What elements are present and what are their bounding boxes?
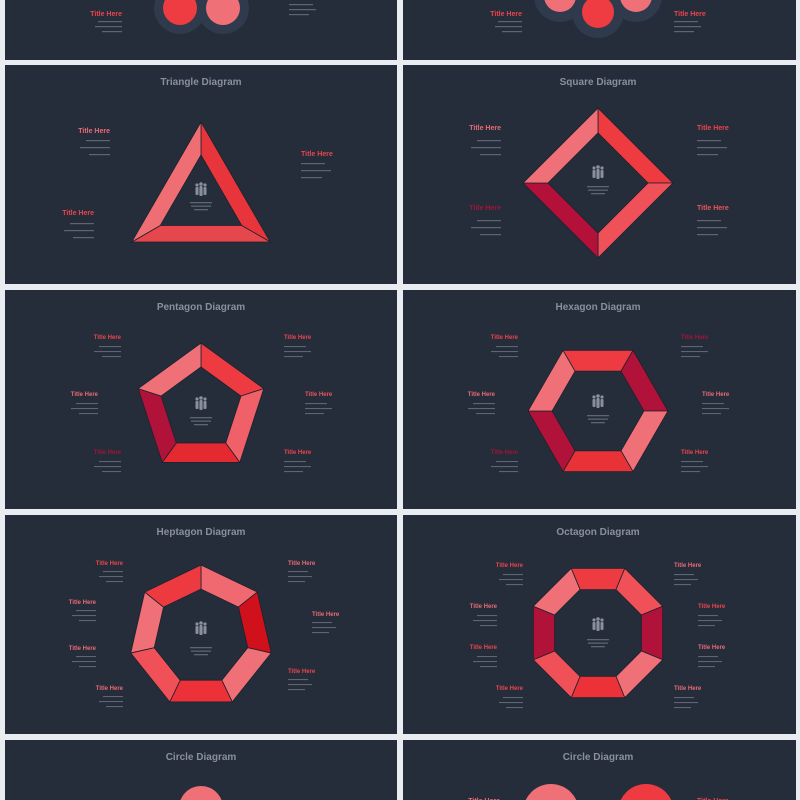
heading: Hexagon Diagram [555,302,641,313]
pentagon shape [138,343,264,462]
slide: top-left partial [5,0,397,60]
heptagon shape [131,565,271,702]
labels: Title Here [491,335,519,341]
labels: Title Here [470,645,498,651]
labels [468,335,730,456]
heading: Circle Diagram [563,752,633,763]
slide: top-right partial: Title Here [674,11,706,18]
labels [62,128,333,217]
labels: Title Here [681,335,709,341]
labels [470,563,726,692]
labels: Title Here [69,600,97,606]
labels: Title Here [674,563,702,569]
panel: heptagon diagram [5,515,397,734]
labels: Title Here [96,561,124,567]
labels [71,335,333,456]
slide: top-right partial: Title Here [490,11,522,18]
panel: octagon diagram [403,515,796,734]
labels: Title Here [697,205,729,212]
labels: Title Here [62,210,94,217]
labels: Title Here [469,205,501,212]
labels: Title Here [496,563,524,569]
labels: Title Here [71,392,99,398]
heading: Octagon Diagram [556,527,640,538]
labels: Title Here [284,335,312,341]
labels: Title Here [702,392,730,398]
panel: triangle diagram [5,65,397,284]
heading: Circle Diagram [166,752,236,763]
panel: circle diagram left [5,740,397,800]
labels: Title Here [681,450,709,456]
labels: Title Here [697,125,729,132]
labels: Title Here [491,450,519,456]
labels: Title Here [470,604,498,610]
heading: Heptagon Diagram [157,527,246,538]
labels [69,561,340,692]
labels: Title Here [94,335,122,341]
labels: Title Here [698,645,726,651]
labels: Title Here [96,686,124,692]
heading: Pentagon Diagram [157,302,245,313]
labels: Title Here [284,450,312,456]
circles [523,784,579,800]
heading: Triangle Diagram [160,77,242,88]
labels: Title Here [674,686,702,692]
labels: Title Here [94,450,122,456]
panel: square diagram [403,65,796,284]
labels: Title Here [698,604,726,610]
slide: top-left partial: Title Here [90,11,122,18]
circle [179,786,223,800]
labels: Title Here [469,125,501,132]
octagon shape [533,568,663,698]
labels [469,125,729,212]
labels: Title Here [78,128,110,135]
hexagon shape [528,350,668,472]
labels: Title Here [305,392,333,398]
slide: top-right partial [403,0,796,60]
panel: pentagon diagram [5,290,397,509]
heading: Square Diagram [560,77,636,88]
square shape [523,108,673,258]
labels: Title Here [468,392,496,398]
panel: hexagon diagram [403,290,796,509]
labels: Title Here [496,686,524,692]
labels: Title Here [288,669,316,675]
panel: circle diagram right [403,740,796,800]
labels: Title Here [301,151,333,158]
labels: Title Here [69,646,97,652]
labels: Title Here [288,561,316,567]
triangle shape [132,122,270,250]
labels: Title Here [312,612,340,618]
